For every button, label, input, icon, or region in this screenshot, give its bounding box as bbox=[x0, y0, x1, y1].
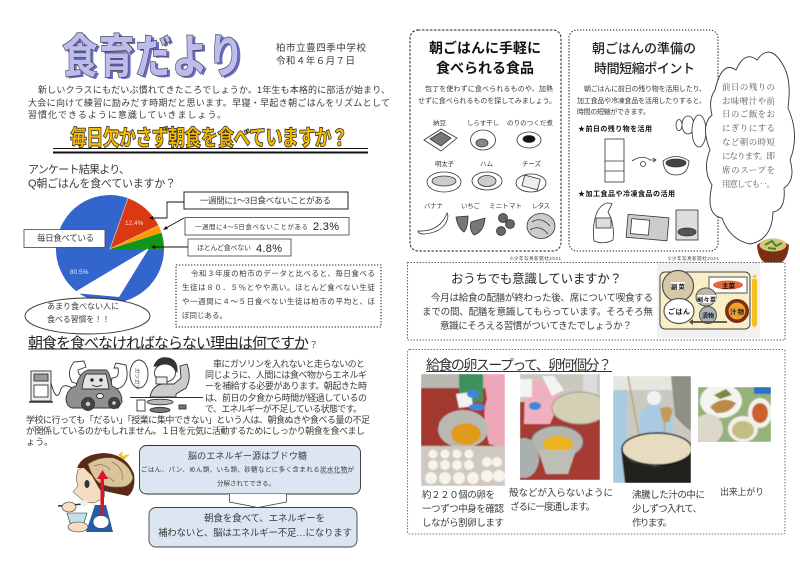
paragraph: why breakfast: 学校に行っても「だるい」「授業に集中できない」という人は、朝食ぬきや食べる量の不足 bbox=[26, 414, 370, 425]
thought cloud: 席のスープを bbox=[722, 165, 775, 175]
title: 食育だより bbox=[64, 32, 246, 85]
panel: time saving points: ★前日の残り物を活用 bbox=[578, 124, 652, 133]
panel: easy breakfast foods: ハム bbox=[480, 160, 494, 168]
pie chart bbox=[56, 195, 164, 303]
note: comparison with city data: や一週間に４～５日食べない生徒は柏市の平均と、ほ bbox=[182, 296, 376, 306]
intro text: 新しいクラスにもだいぶ慣れてきたころでしょうか。1年生も本格的に部活が始まり、 bbox=[38, 84, 390, 95]
label: every day: 毎日食べている bbox=[37, 233, 94, 243]
panel: time saving points: 加工食品や冷凍食品を活用したりすると、 bbox=[577, 96, 706, 105]
callout: eat habit: あまり食べない人に bbox=[47, 302, 119, 311]
photo credits bbox=[510, 255, 719, 262]
box: glucose: ごはん、パン、めん類、いも類、砂糖などに多く含まれる炭水化物が bbox=[141, 464, 354, 474]
caption: photo 2: 殻などが入らないように bbox=[509, 487, 613, 499]
photo 2: straining eggs bbox=[520, 374, 600, 480]
illustration: meal tray: 漬物 bbox=[702, 312, 714, 320]
note: comparison with city data: 生徒は８０．５％とやや高い。ほとんど食べない生徒 bbox=[182, 282, 376, 292]
panel: easy breakfast foods: ミニトマト bbox=[489, 202, 522, 210]
thought cloud: 用意しても‥。 bbox=[722, 179, 775, 189]
icons: food row 1 bbox=[424, 129, 541, 151]
caption: photo 3: 少しずつ入れて、 bbox=[632, 503, 702, 515]
paragraph: why breakfast: 車にガソリンを入れないと走らないのと bbox=[213, 358, 365, 369]
icons: food row 2 bbox=[427, 172, 546, 192]
survey question: Q朝ごはんを食べていますか？ bbox=[28, 176, 176, 190]
arrows from labels to pie bbox=[149, 202, 188, 249]
panel: easy breakfast foods: いちご bbox=[461, 201, 480, 210]
label: 4-5 days bbox=[185, 218, 349, 235]
panel: mindful at home: 今月は給食の配膳が終わった後、席について喫食する bbox=[431, 292, 653, 304]
panel: time saving points: 時間短縮ポイント bbox=[594, 61, 695, 76]
panel: school lunch egg soup bbox=[408, 350, 785, 534]
paragraph: why breakfast: で、エネルギーが不足している状態です。 bbox=[205, 403, 362, 414]
panel: time saving points: 朝ごはんに前日の残り物を活用したり、 bbox=[584, 84, 706, 93]
thought cloud bbox=[676, 52, 795, 244]
illustration: meal tray: 副々菜 bbox=[697, 296, 716, 304]
box: brain needs energy: 補わないと、脳はエネルギー不足…になります bbox=[158, 527, 352, 539]
paragraph: why breakfast: が関係しているのかもしれません。１日を元気に活動するためにしっかり朝食を食べまし bbox=[26, 425, 365, 436]
title: 食育だより bbox=[62, 30, 244, 83]
callout: eat habit bbox=[25, 249, 150, 334]
intro text: 大会に向けて練習に励みだす時期だと思います。早寝・早起き朝ごはんをリズムとして bbox=[28, 97, 390, 108]
heading: reason for breakfast: 朝食を食べなければならない理由は何ですか bbox=[28, 335, 309, 352]
paragraph: why breakfast: ょう。 bbox=[26, 437, 53, 447]
panel: easy breakfast foods: バナナ bbox=[424, 202, 443, 210]
pie chart: 80.5% bbox=[70, 269, 89, 276]
thought cloud: になります。即 bbox=[722, 151, 775, 161]
photo 3: pouring into pot bbox=[613, 376, 691, 483]
label: almost never: 4.8% bbox=[256, 243, 282, 255]
paragraph: why breakfast: は、前日の夕食から時間が経過しているの bbox=[205, 392, 367, 403]
heading: reason for breakfast: ？ bbox=[309, 340, 318, 350]
note: comparison with city data bbox=[176, 265, 381, 327]
caption: photo 1: しながら割卵します bbox=[422, 517, 504, 529]
panel: time saving points bbox=[569, 30, 718, 251]
thought cloud: 前日の残りの bbox=[722, 82, 775, 92]
thought cloud: 日のご飯をお bbox=[722, 109, 775, 119]
panel: easy breakfast foods bbox=[410, 30, 561, 251]
note: comparison with city data: 令和３年度の柏市のデータと比べると、毎日食べる bbox=[191, 268, 375, 278]
panel: time saving points: ★加工食品や冷凍食品の活用 bbox=[578, 189, 675, 198]
panel: easy breakfast foods: しらす干し bbox=[467, 119, 499, 127]
photo 4: finished meal bbox=[698, 387, 771, 442]
photo credits: ©少年写真新聞社2021 bbox=[668, 255, 719, 262]
illustration: boy eating: ガツガツ bbox=[133, 368, 141, 390]
panel: easy breakfast foods: のりのつくだ煮 bbox=[507, 118, 554, 127]
caption: photo 3: 沸騰した汁の中に bbox=[632, 489, 705, 501]
panel: easy breakfast foods: 朝ごはんに手軽に bbox=[429, 40, 541, 56]
icon: fridge, arrow and bowl bbox=[605, 139, 689, 182]
illustration: boy eating bbox=[130, 358, 203, 412]
connector arrow between boxes bbox=[230, 494, 286, 508]
panel: easy breakfast foods: 納豆 bbox=[433, 118, 446, 127]
callout: eat habit: 食べる習慣を！！ bbox=[47, 314, 110, 324]
icon: frozen food packages bbox=[593, 203, 698, 243]
illustration: meal tray: ごはん bbox=[668, 307, 690, 316]
panel: mindful at home: 意識にそろえる習慣がついてきたでしょうか？ bbox=[440, 320, 632, 332]
icons: food row 3 bbox=[418, 213, 555, 238]
box: glucose bbox=[140, 446, 360, 494]
label: 1-3 days: 一週間に1～3日食べないことがある bbox=[200, 196, 331, 206]
survey question bbox=[28, 163, 176, 190]
intro text bbox=[28, 84, 390, 120]
panel: mindful at home bbox=[408, 262, 785, 340]
label: 4-5 days: 2.3% bbox=[313, 221, 339, 233]
panel: easy breakfast foods: せずに食べられるものを探してみましょう。 bbox=[418, 96, 556, 105]
paragraph: why breakfast bbox=[26, 358, 370, 447]
panel: time saving points: 朝ごはんの準備の bbox=[592, 41, 696, 56]
school name and date: 令和４年６月７日 bbox=[276, 55, 355, 67]
label: almost never bbox=[188, 239, 291, 256]
panel: mindful at home: までの間、配膳を意識してもらっています。そろそろ無 bbox=[422, 306, 653, 318]
thought cloud: にぎりにする bbox=[722, 123, 775, 133]
survey question: アンケート結果より、 bbox=[28, 163, 130, 176]
intro text: 習慣化できるように意識していきましょう。 bbox=[28, 109, 226, 120]
caption: photo 1: 一つずつ中身を確認 bbox=[422, 503, 504, 515]
panel: easy breakfast foods: 包丁を使わずに食べられるものや、加熱 bbox=[425, 84, 553, 93]
paragraph: why breakfast: 同じように、人間には食べ物からエネルギ bbox=[205, 369, 367, 380]
panel: mindful at home: おうちでも意識していますか？ bbox=[451, 272, 622, 286]
illustration: fuel pump and car bbox=[29, 361, 127, 410]
school name and date: 柏市立豊四季中学校 bbox=[276, 42, 366, 54]
illustration: meal tray bbox=[657, 263, 760, 338]
box: brain needs energy: 朝食を食べて、エネルギーを bbox=[204, 514, 325, 524]
caption: photo 2: ざるに一度通します。 bbox=[510, 501, 595, 513]
panel: school lunch egg soup: 給食の卵スープって、卵何個分？ bbox=[426, 357, 612, 373]
pie chart: 12.4% bbox=[125, 220, 144, 227]
photo credits: ©少年写真新聞社2021 bbox=[510, 255, 561, 262]
label: 1-3 days bbox=[184, 192, 348, 209]
panel: easy breakfast foods: 食べられる食品 bbox=[436, 60, 534, 76]
thought cloud: お味噌汁や前 bbox=[722, 96, 775, 106]
caption: photo 1: 約２２０個の卵を bbox=[422, 489, 495, 501]
caption: photo 2 bbox=[509, 487, 613, 513]
thought cloud: など朝の時短 bbox=[722, 137, 775, 147]
paragraph: why breakfast: ーを補給する必要があります。朝起きた時 bbox=[205, 380, 367, 391]
banner heading: 毎日欠かさず朝食を食べていますか？ bbox=[70, 125, 348, 151]
photo 1: cracking eggs bbox=[421, 374, 505, 486]
icon: miso soup bbox=[757, 238, 789, 266]
caption: photo 3: 作ります。 bbox=[632, 517, 672, 529]
school name and date bbox=[276, 42, 366, 67]
caption: photo 4: 出来上がり bbox=[720, 486, 764, 497]
panel: easy breakfast foods: 明太子 bbox=[435, 159, 454, 168]
illustration: meal tray: 副菜 bbox=[671, 282, 686, 291]
caption: photo 1 bbox=[422, 489, 504, 529]
panel: easy breakfast foods: レタス bbox=[532, 201, 550, 210]
box: glucose: 分解されてできる。 bbox=[217, 478, 275, 488]
box: glucose: 脳のエネルギー源はブドウ糖 bbox=[188, 450, 307, 461]
panel: easy breakfast foods: チーズ bbox=[522, 159, 542, 168]
illustration: meal tray: 主菜 bbox=[722, 281, 736, 290]
panel: time saving points: 時間の短縮ができます。 bbox=[577, 107, 650, 116]
label: every day bbox=[24, 230, 105, 248]
caption: photo 3 bbox=[632, 489, 705, 529]
illustration: meal tray: 汁物 bbox=[730, 307, 744, 316]
label: 4-5 days: 一週間に4～5日食べないことがある bbox=[195, 222, 308, 231]
box: brain needs energy bbox=[149, 508, 357, 547]
label: almost never: ほとんど食べない bbox=[197, 244, 251, 252]
note: comparison with city data: ぼ同じある。 bbox=[182, 311, 227, 320]
illustration: brain and boy bbox=[58, 451, 134, 532]
